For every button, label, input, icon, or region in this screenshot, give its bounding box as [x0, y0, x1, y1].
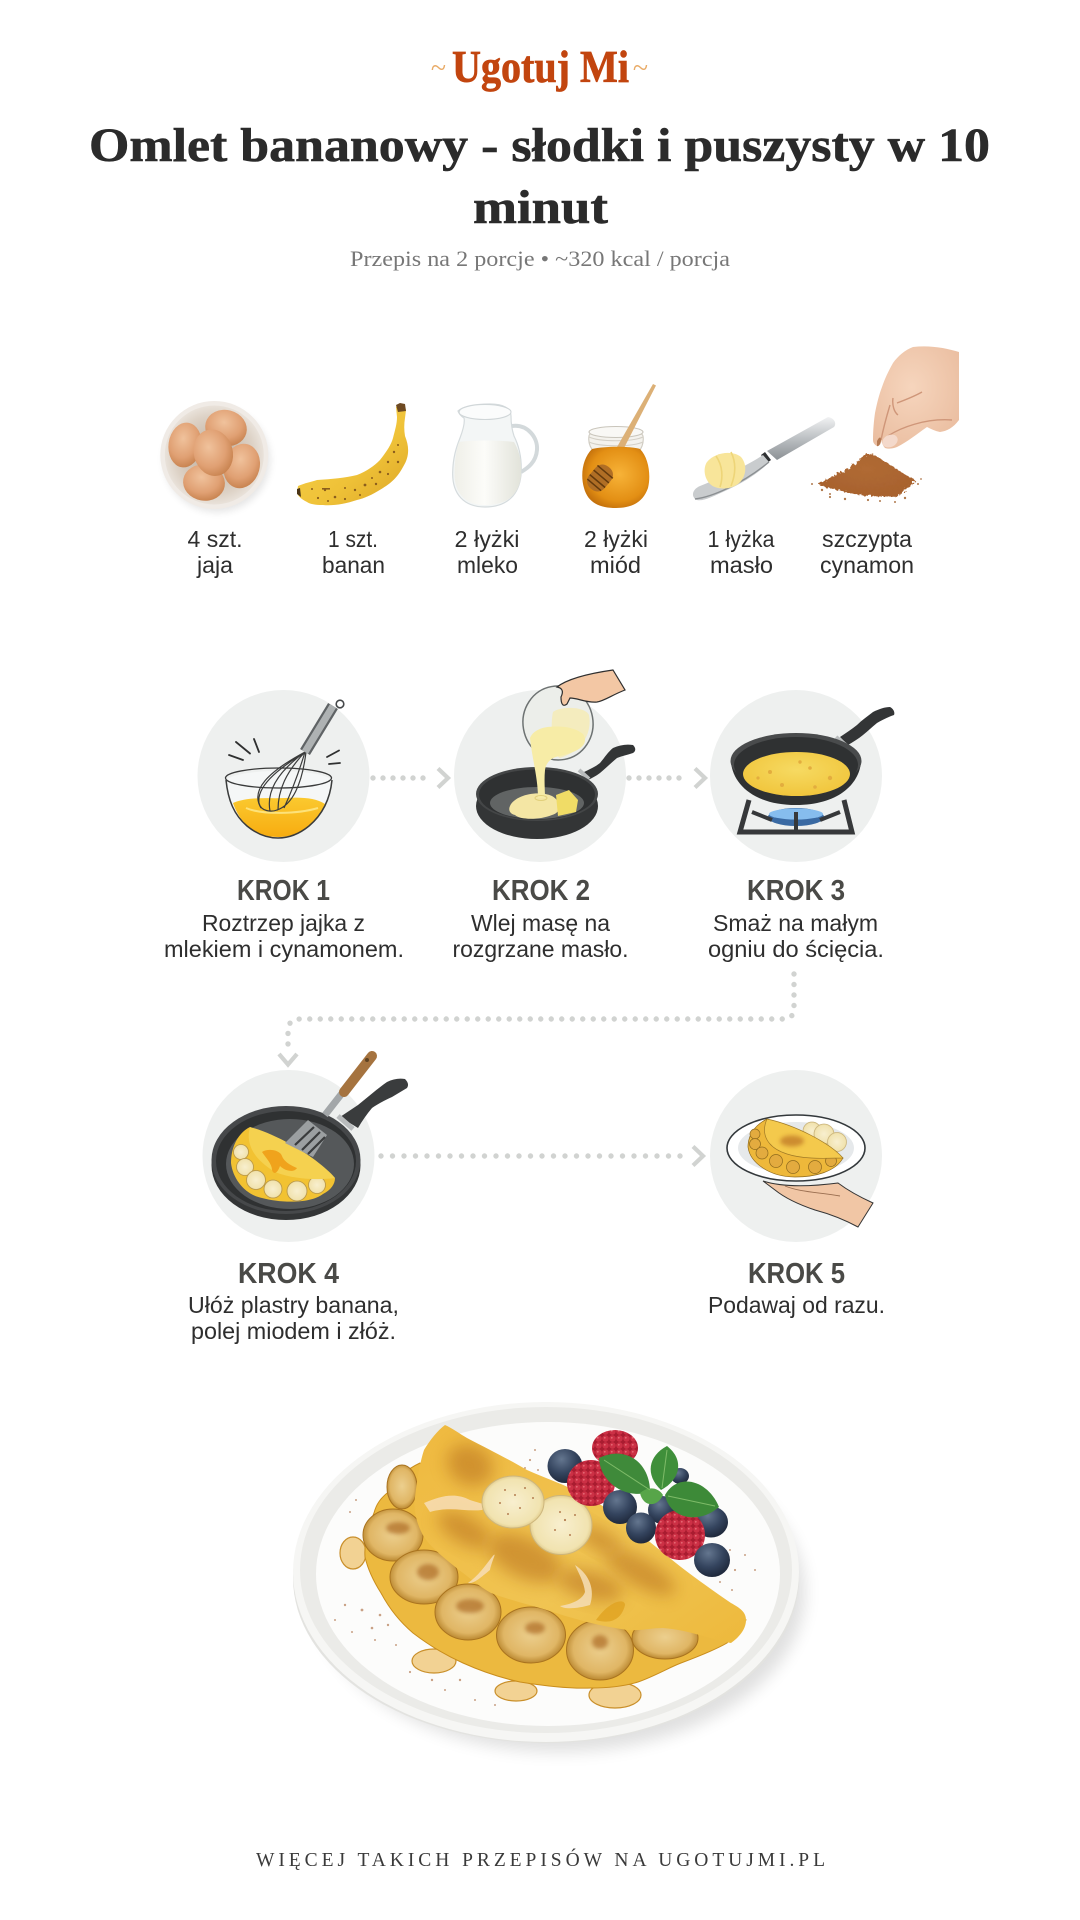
footer: WIĘCEJ TAKICH PRZEPISÓW NA UGOTUJMI.PL [256, 1849, 825, 1871]
subtitle: Przepis na 2 porcje • ~320 kcal / porcja [350, 246, 730, 271]
step text [708, 910, 884, 962]
step text: Ułóż plastry banana, [188, 1292, 399, 1318]
title: Omlet bananowy - słodki i puszysty w 10 [89, 119, 990, 172]
icon: omelet in pan on burner [710, 690, 894, 862]
step text: mlekiem i cynamonem. [164, 936, 404, 962]
omelet lower fold [365, 1463, 746, 1688]
step text: Wlej masę na [471, 910, 610, 936]
step text: polej miodem i złóż. [191, 1318, 396, 1344]
step text [188, 1292, 399, 1344]
ingredient labels: banan [322, 552, 385, 578]
brand logo: Ugotuj Mi: ~ [633, 53, 648, 84]
step heading: KROK 4 [238, 1258, 339, 1290]
step heading: KROK 2 [492, 875, 590, 907]
icon: pouring batter into pan [454, 670, 635, 862]
icon: honey jar with dipper [582, 384, 656, 508]
ingredient labels: cynamon [820, 552, 914, 578]
step text [164, 910, 404, 962]
step heading: KROK 5 [748, 1258, 845, 1290]
step 1 [164, 690, 404, 962]
ingredient labels: mleko [457, 552, 518, 578]
honey drips [340, 1537, 641, 1708]
ingredient labels: 4 szt. [188, 526, 242, 552]
berries and mint [548, 1430, 730, 1577]
icon: butter on knife [693, 417, 835, 500]
step text [452, 910, 628, 962]
cinnamon specks on plate [334, 1449, 756, 1706]
step text: ogniu do ścięcia. [708, 936, 884, 962]
banana slice caramel marks [386, 1522, 608, 1649]
icon: folded omelet in pan with spatula [202, 1056, 408, 1242]
icon: eggs in bowl [160, 401, 270, 512]
ingredient labels: 2 łyżki [584, 526, 648, 552]
step text: Podawaj od razu. [708, 1292, 885, 1318]
arrow: step 3 to step 4 [279, 974, 794, 1064]
plate [293, 1402, 805, 1752]
step heading: KROK 3 [747, 875, 845, 907]
arrow: step 4 to step 5 [381, 1146, 703, 1166]
step 4 [188, 1056, 408, 1344]
ingredient labels: 2 łyżki [454, 526, 520, 552]
icon: omelet on plate held by hand [710, 1070, 882, 1242]
step 5 [708, 1070, 885, 1318]
banana slices on top [482, 1476, 592, 1554]
step text: Roztrzep jajka z [202, 910, 365, 936]
icon: milk jug [453, 404, 537, 507]
step heading: KROK 1 [237, 875, 330, 907]
ingredient labels: jaja [196, 552, 233, 578]
banana slices under fold [363, 1465, 698, 1680]
ingredient labels: masło [710, 552, 773, 578]
icon: whisk in bowl [198, 690, 370, 862]
brand logo: Ugotuj Mi: ~ [431, 53, 446, 84]
brand logo: Ugotuj Mi: Ugotuj Mi [452, 42, 629, 92]
omelet upper fold [414, 1425, 746, 1643]
header [89, 42, 990, 271]
step 3 [708, 690, 894, 962]
ingredient labels: 1 łyżka [708, 526, 775, 552]
arrow: step 2 to step 3 [629, 768, 705, 788]
panel: steps [164, 670, 894, 1344]
icon: hand and cinnamon [811, 346, 959, 503]
ingredient labels: miód [590, 552, 641, 578]
title [89, 119, 990, 234]
arrow: step 1 to step 2 [373, 768, 448, 788]
panel: ingredients [160, 346, 959, 578]
icon: banana [297, 403, 408, 505]
step 2 [452, 670, 635, 962]
title: minut [473, 181, 608, 234]
step text: Smaż na małym [713, 910, 878, 936]
ingredient labels: szczypta [822, 526, 912, 552]
ingredient labels [188, 526, 914, 578]
ingredient labels: 1 szt. [328, 526, 378, 552]
photo: banana omelet on plate [293, 1402, 805, 1752]
step text: rozgrzane masło. [452, 936, 628, 962]
